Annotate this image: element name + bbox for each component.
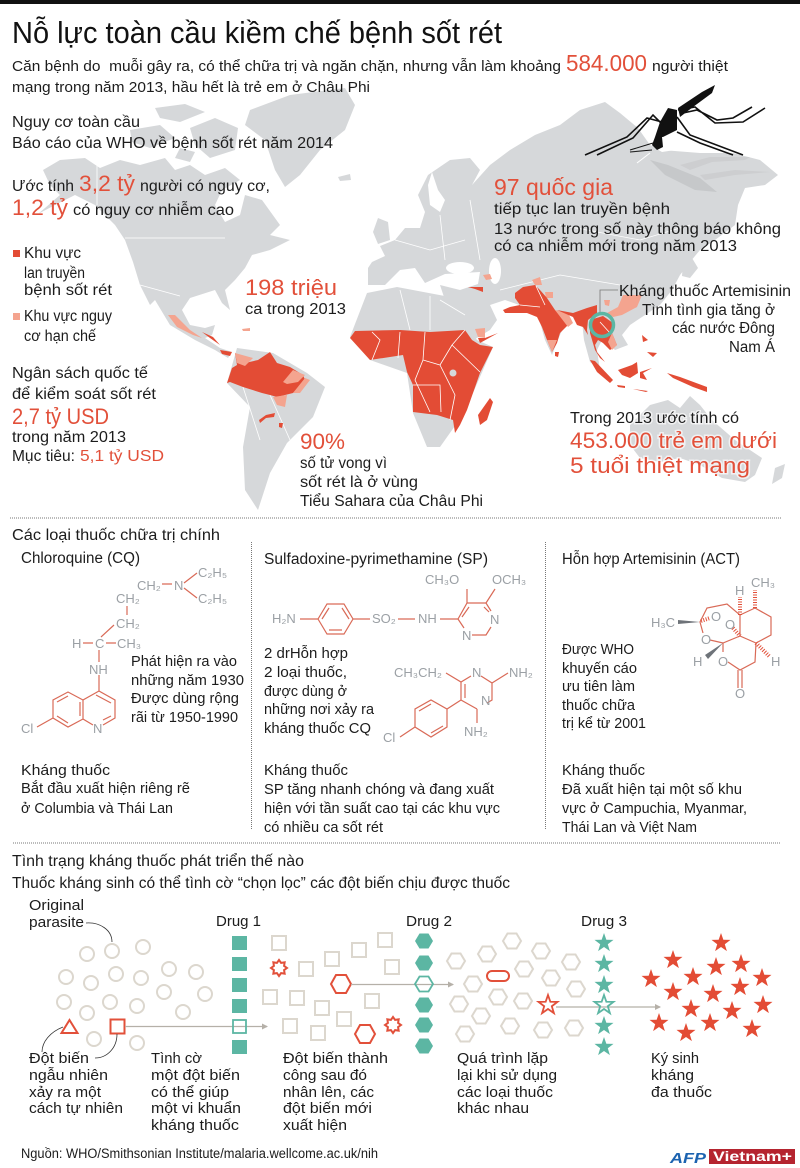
description: 2 loại thuốc, [264, 665, 347, 681]
stat: 90 percent: sốt rét là ở vùng [300, 474, 418, 491]
resistance note: SP tăng nhanh chóng và đang xuất [264, 782, 494, 798]
callout: artemisinin resistance [619, 283, 791, 356]
legend item: limited risk: Khu vực nguy [24, 308, 112, 325]
chemical structure: pyrimethamine: N [472, 665, 481, 680]
stat: child deaths: 453.000 trẻ em dưới [570, 428, 777, 453]
chemical structure: sulfadoxine: NH [418, 611, 437, 626]
text: global risk heading: Nguy cơ toàn cầu [12, 114, 140, 131]
caption: multi-drug resistant: kháng [651, 1068, 694, 1084]
text: global risk heading [12, 114, 333, 152]
heading: how resistance develops: Thuốc kháng sinh có thể tình cờ “chọn lọc” các đột biến chịu được thuốc [12, 875, 510, 892]
resistance note: Kháng thuốc [21, 763, 110, 779]
caption: chance mutation: một vi khuẩn [151, 1101, 241, 1117]
stat: 97 countries: tiếp tục lan truyền bệnh [494, 201, 670, 218]
stage 3: surviving hexagons [447, 934, 585, 1042]
drug name: Hỗn hợp Artemisinin (ACT) [562, 551, 740, 568]
caption: process repeats: các loại thuốc [457, 1085, 553, 1101]
caption: successful mutation [283, 1051, 388, 1134]
stat: international budget: 5,1 tỷ USD [80, 448, 164, 465]
caption: process repeats: Quá trình lặp [457, 1051, 548, 1067]
text: global risk heading: Báo cáo của WHO về bệnh sốt rét năm 2014 [12, 135, 333, 152]
arrow 1 [125, 1024, 268, 1030]
arrow 3 [556, 1004, 661, 1010]
resistance note [562, 763, 747, 836]
diagram: resistance stages [29, 898, 772, 1134]
caption: random mutation: xảy ra một [29, 1085, 101, 1101]
chemical structure: artemisinin: H₃C [651, 615, 675, 630]
caption: successful mutation: xuất hiện [283, 1118, 347, 1134]
caption: process repeats: lại khi sử dụng [457, 1068, 557, 1084]
stat: 97 countries [494, 174, 781, 255]
label: original parasite [29, 898, 112, 942]
chemical structure: artemisinin: O [718, 654, 728, 669]
stat: people at risk: có nguy cơ nhiễm cao [73, 202, 234, 219]
chemical structure: sulfadoxine: OCH₃ [492, 572, 526, 587]
stage 4: multi-drug resistant parasites [642, 933, 772, 1041]
chemical structure: artemisinin: O [711, 609, 721, 624]
drug 2 column [406, 914, 452, 1054]
stat: 97 countries: 97 quốc gia [494, 174, 613, 200]
title: Nỗ lực toàn cầu kiềm chế bệnh sốt rét [12, 15, 502, 50]
stat: 97 countries: 13 nước trong số này thông báo không [494, 221, 781, 238]
stat: 90 percent: số tử vong vì [300, 455, 387, 472]
logo: AFP Vietnam+: AFP [669, 1150, 707, 1167]
stat: people at risk [12, 171, 270, 220]
stat: child deaths: Trong 2013 ước tính có [570, 410, 739, 427]
stat: international budget: trong năm 2013 [12, 429, 126, 446]
stat: child deaths: 5 tuổi thiệt mạng [570, 453, 750, 478]
chemical structure: artemisinin: O [725, 617, 735, 632]
stat: 198 million cases [245, 275, 346, 318]
chemical structure: chloroquine [21, 565, 227, 736]
chemical structure: pyrimethamine: CH₃CH₂ [394, 665, 442, 680]
chemical structure: sulfadoxine [272, 572, 526, 643]
drug 1 column [216, 914, 261, 1054]
legend item: limited risk [13, 308, 112, 345]
stat: 97 countries: có ca nhiễm mới trong năm 2013 [494, 238, 737, 255]
caption: successful mutation: đột biến mới [283, 1101, 372, 1117]
drug 3 column: Drug 3 [581, 914, 627, 930]
heading: main drugs: Các loại thuốc chữa trị chính [12, 527, 220, 544]
resistance note: Bắt đầu xuất hiện riêng rẽ [21, 780, 190, 797]
description [131, 654, 244, 726]
icon: mosquito [585, 85, 765, 163]
chemical structure: chloroquine: Cl [21, 721, 33, 736]
label: original parasite: Original [29, 898, 84, 914]
resistance note: Thái Lan và Việt Nam [562, 820, 697, 836]
description: kháng thuốc CQ [264, 721, 371, 737]
stage 1: parasites [57, 940, 212, 1050]
description: 2 drHỗn hợp [264, 645, 348, 662]
chemical structure: sulfadoxine: CH₃O [425, 572, 459, 587]
chemical structure: chloroquine: NH [89, 662, 108, 677]
stat: child deaths [570, 410, 777, 478]
mutations: stage 2 [271, 960, 401, 1043]
chemical structure: chloroquine: CH₂ [116, 616, 140, 631]
chemical structure: sulfadoxine: N [490, 612, 499, 627]
caption: chance mutation: có thể giúp [151, 1085, 229, 1101]
inland seas [428, 142, 675, 284]
chemical structure: artemisinin: O [735, 686, 745, 701]
description: những năm 1930 [131, 673, 244, 689]
legend item: limited risk: cơ hạn chế [24, 328, 96, 345]
intro text [12, 50, 729, 96]
mutations: stage 3 [487, 971, 558, 1013]
description: rãi từ 1950-1990 [131, 710, 238, 726]
chemical structure: chloroquine: CH₂ [137, 578, 161, 593]
chemical structure: artemisinin: H [771, 654, 780, 669]
chemical structure: chloroquine: N [174, 578, 183, 593]
caption: chance mutation: một đột biến [151, 1068, 240, 1084]
chemical structure: chloroquine: H [72, 636, 81, 651]
drug 2 column: Drug 2 [406, 914, 452, 930]
legend item: transmission: bệnh sốt rét [24, 282, 113, 299]
chemical structure: sulfadoxine: SO₂ [372, 611, 396, 626]
caption: random mutation: ngẫu nhiên [29, 1067, 108, 1084]
mosquito shadow [650, 157, 770, 192]
stat: international budget: để kiểm soát sốt rét [12, 386, 157, 403]
caption: random mutation [29, 1051, 123, 1117]
chemical structure: pyrimethamine: Cl [383, 730, 395, 745]
stat: 90 percent [300, 429, 483, 510]
caption: random mutation: Đột biến [29, 1051, 89, 1067]
chemical structure: pyrimethamine [383, 665, 533, 745]
chemical structure: artemisinin: H [735, 583, 744, 598]
chemical structure: chloroquine: N [93, 721, 102, 736]
caption: random mutation: cách tự nhiên [29, 1101, 123, 1117]
stat: people at risk: Ước tính [12, 178, 74, 195]
resistance note [21, 763, 190, 817]
panel: artemisinin combination [562, 551, 780, 836]
description: Được dùng rộng [131, 691, 239, 707]
chemical structure: sulfadoxine: H₂N [272, 611, 296, 626]
resistance note: Kháng thuốc [562, 763, 645, 779]
resistance note: có nhiều ca sốt rét [264, 820, 383, 836]
stat: people at risk: người có nguy cơ, [140, 178, 270, 195]
logo: AFP Vietnam+: Vietnam+ [713, 1148, 792, 1164]
callout: artemisinin resistance: Tình tình gia tăng ở [642, 302, 775, 319]
chemical structure: artemisinin: H [693, 654, 702, 669]
intro text: Căn bệnh do muỗi gây ra, có thể chữa trị và ngăn chặn, nhưng vẫn làm khoảng [12, 58, 561, 75]
label: original parasite: parasite [29, 915, 84, 931]
panel: chloroquine [21, 550, 244, 817]
intro text: mạng trong năm 2013, hầu hết là trẻ em ở Châu Phi [12, 79, 370, 96]
country borders [97, 163, 690, 440]
panel: sulfadoxine-pyrimethamine [264, 551, 533, 836]
arrow 2 [351, 982, 454, 988]
legend item: transmission: lan truyền [24, 265, 85, 282]
description [264, 645, 375, 737]
description: Phát hiện ra vào [131, 654, 237, 670]
description: Được WHO [562, 642, 634, 658]
legend item: transmission: Khu vực [24, 245, 81, 262]
transmission areas: Africa [350, 330, 493, 433]
chemical structure: chloroquine: C₂H₅ [198, 565, 227, 580]
resistance note: hiện với tần suất cao tại các khu vực [264, 801, 500, 817]
stat: 90 percent: Tiểu Sahara của Châu Phi [300, 493, 483, 510]
transmission areas: Americas [168, 315, 310, 428]
highlight ring: Southeast Asia [590, 290, 618, 336]
chemical structure: chloroquine: CH₂ [116, 591, 140, 606]
caption: multi-drug resistant: Ký sinh [651, 1051, 699, 1067]
legend [13, 245, 113, 345]
resistance note: Kháng thuốc [264, 763, 348, 779]
callout: artemisinin resistance: Nam Á [729, 339, 776, 356]
caption: chance mutation [151, 1051, 241, 1134]
description: thuốc chữa [562, 698, 636, 714]
callout: artemisinin resistance: Kháng thuốc Artemisinin [619, 283, 791, 300]
world map [38, 85, 785, 510]
chemical structure: artemisinin: O [701, 632, 711, 647]
heading: how resistance develops: Tình trạng kháng thuốc phát triển thế nào [12, 853, 304, 870]
description: ưu tiên làm [562, 679, 635, 695]
caption: multi-drug resistant: đa thuốc [651, 1085, 712, 1101]
resistance note: ở Columbia và Thái Lan [21, 801, 173, 817]
caption: successful mutation: công sau đó [283, 1068, 367, 1084]
drug name: Sulfadoxine-pyrimethamine (SP) [264, 551, 488, 568]
resistance note: Đã xuất hiện tại một số khu [562, 782, 742, 798]
stat: 90 percent: 90% [300, 429, 345, 454]
intro text: 584.000 [566, 50, 647, 76]
stat: international budget [12, 365, 164, 465]
source note: Nguồn: WHO/Smithsonian Institute/malaria.wellcome.ac.uk/nih [21, 1146, 378, 1161]
chemical structure: sulfadoxine: N [462, 628, 471, 643]
chemical structure: pyrimethamine: N [481, 693, 490, 708]
stat: 198 million cases: 198 triệu [245, 275, 337, 300]
stat: people at risk: 1,2 tỷ [12, 195, 68, 220]
land masses [38, 88, 785, 510]
description [562, 642, 646, 732]
caption: process repeats: khác nhau [457, 1101, 529, 1117]
drug name: Chloroquine (CQ) [21, 550, 140, 567]
description: những nơi xảy ra [264, 702, 375, 718]
caption: successful mutation: nhân lên, các [283, 1085, 374, 1101]
caption: chance mutation: Tình cờ [151, 1051, 202, 1067]
caption: multi-drug resistant [651, 1051, 712, 1101]
stat: 198 million cases: ca trong 2013 [245, 301, 346, 318]
resistance note: vực ở Campuchia, Myanmar, [562, 801, 747, 817]
chemical structure: artemisinin [651, 575, 780, 701]
heading: how resistance develops [12, 853, 510, 892]
stat: international budget: Mục tiêu: [12, 448, 75, 465]
caption: successful mutation: Đột biến thành [283, 1051, 388, 1067]
chemical structure: pyrimethamine: NH₂ [509, 665, 533, 680]
chemical structure: pyrimethamine: NH₂ [464, 724, 488, 739]
drug 3 column [581, 914, 627, 1055]
chemical structure: chloroquine: C₂H₅ [198, 591, 227, 606]
chemical structure: chloroquine: C [95, 636, 104, 651]
callout: artemisinin resistance: các nước Đông [672, 320, 775, 337]
intro text: người thiệt [652, 58, 729, 75]
drug 1 column: Drug 1 [216, 914, 261, 930]
chemical structure: artemisinin: CH₃ [751, 575, 775, 590]
description: được dùng ở [264, 684, 347, 700]
stage 2: surviving squares [263, 933, 399, 1040]
caption: chance mutation: kháng thuốc [151, 1118, 239, 1134]
stat: people at risk: 3,2 tỷ [79, 171, 135, 196]
description: trị kể từ 2001 [562, 716, 646, 732]
resistance note [264, 763, 500, 836]
top bar [0, 0, 800, 4]
mutations: triangle and square [42, 1020, 124, 1058]
chemical structure: chloroquine: CH₃ [117, 636, 141, 651]
caption: process repeats [457, 1051, 557, 1117]
description: khuyến cáo [562, 661, 637, 677]
transmission areas: Asia and Oceania [468, 274, 707, 392]
legend item: transmission [13, 245, 113, 299]
stat: international budget: Ngân sách quốc tế [12, 365, 148, 382]
logo: AFP Vietnam+ [669, 1148, 795, 1167]
stat: international budget: 2,7 tỷ USD [12, 404, 109, 429]
